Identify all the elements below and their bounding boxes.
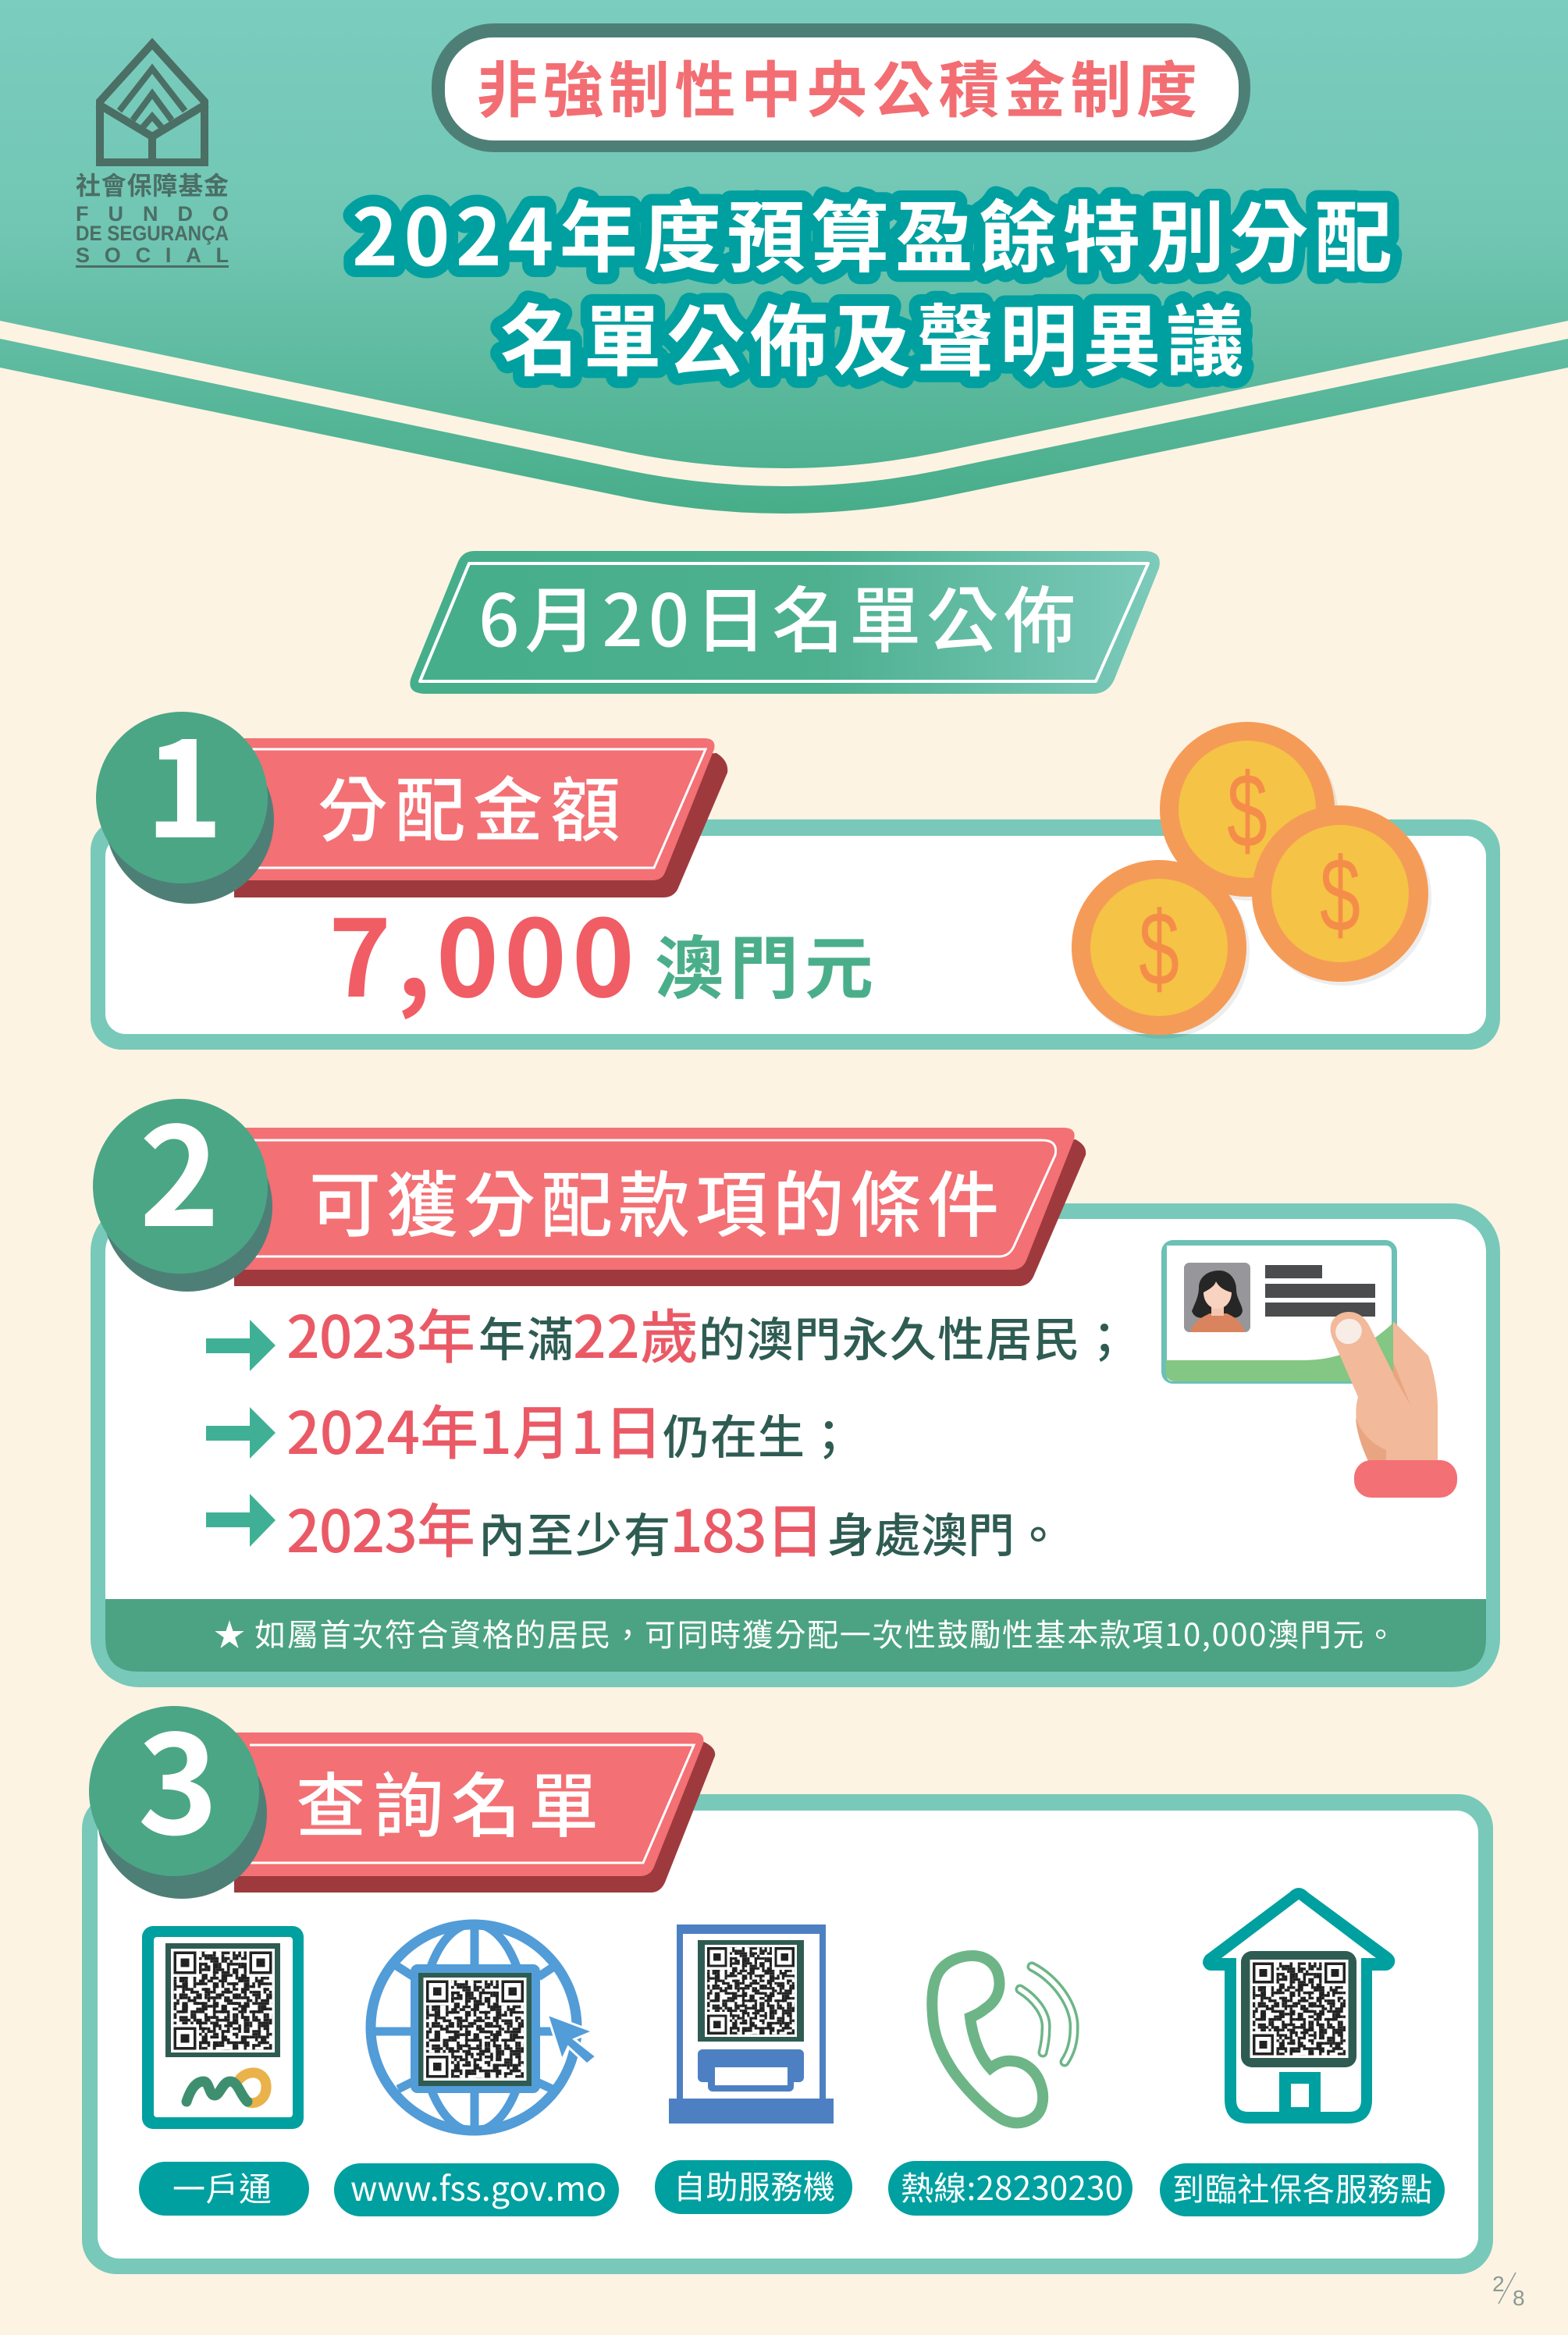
- top pill heading: [432, 23, 1250, 152]
- arrow: [206, 1407, 276, 1459]
- heading 3: 查詢名單: [234, 1733, 715, 1893]
- logo text: [76, 166, 229, 268]
- number badge 3: 3: [137, 1676, 219, 1874]
- label: 自助服務機: 自助服務機: [674, 2161, 835, 2208]
- main title: 名單公佈及聲明異議: [500, 279, 1244, 392]
- logo text: SOCIAL: [76, 243, 229, 267]
- icon: globe website QR: [370, 1924, 596, 2131]
- heading 1: 分配金額: [234, 738, 727, 897]
- icon: self-service kiosk QR: [669, 1925, 834, 2124]
- condition 1: 年滿: [478, 1303, 574, 1370]
- number badge 2: [93, 1068, 272, 1292]
- footer note bar: [105, 1599, 1486, 1672]
- condition 2: [206, 1386, 852, 1471]
- icon: logo house tree: [98, 44, 207, 162]
- coin right: $: [1320, 836, 1360, 954]
- number badge 1: [96, 684, 274, 904]
- main title: 名單公佈及聲明異議: [500, 279, 1244, 392]
- main title: [352, 175, 1392, 392]
- icon: house service point QR: [1203, 1888, 1395, 2124]
- number badge 2: 2: [139, 1068, 220, 1266]
- coin top: [1160, 722, 1338, 901]
- unit: 澳門元: 澳門元: [655, 914, 873, 1013]
- header banner: [0, 0, 1568, 514]
- top pill heading: 非強制性中央公積金制度: [477, 42, 1197, 130]
- icon: mobile app QR: [142, 1926, 304, 2129]
- label: 一戶通: 一戶通: [172, 2163, 272, 2211]
- mo logo: [187, 2073, 266, 2103]
- cursor: [547, 2014, 596, 2064]
- page number: [1492, 2272, 1525, 2310]
- condition 3: 內至少有: [478, 1498, 670, 1566]
- label: 一戶通: [139, 2162, 309, 2216]
- coin top: $: [1227, 752, 1268, 869]
- heading 1: 分配金額: 分配金額: [318, 754, 620, 855]
- panel 1: amount: [91, 819, 1500, 1050]
- condition 2: 2024年1月1日: [286, 1386, 663, 1471]
- icon: ID card in hand: [1161, 1240, 1457, 1498]
- label: 熱線:28230230: 熱線:28230230: [901, 2163, 1123, 2210]
- footer note bar: ★ 如屬首次符合資格的居民，可同時獲分配一次性鼓勵性基本款項10,000澳門元。: [214, 1610, 1396, 1655]
- condition 3: 身處澳門。: [827, 1498, 1061, 1566]
- amount: 7,000: 7,000: [329, 874, 635, 1028]
- main title: 2024年度預算盈餘特別分配: [352, 175, 1392, 288]
- logo text: DE SEGURANÇA: [76, 222, 229, 245]
- photo: [1184, 1263, 1250, 1332]
- heading 2: 可獲分配款項的條件: 可獲分配款項的條件: [309, 1148, 999, 1252]
- icon: coins: [1072, 722, 1431, 1039]
- date badge: 6月20日名單公佈: 6月20日名單公佈: [478, 563, 1076, 667]
- date badge: 6月20日名單公佈: [410, 551, 1160, 694]
- heading 2: 可獲分配款項的條件: [234, 1128, 1086, 1286]
- condition 3: 2023年: [286, 1484, 475, 1569]
- coin left: [1072, 860, 1250, 1039]
- logo: Fundo de Segurança Social: [76, 44, 229, 268]
- page number: 2: [1492, 2272, 1505, 2296]
- condition 1: 22歲: [573, 1290, 699, 1375]
- number badge 3: [89, 1676, 267, 1899]
- icon: telephone hotline: [932, 1956, 1074, 2123]
- arrow: [206, 1494, 276, 1547]
- coin left: $: [1139, 890, 1179, 1008]
- cuff: [1354, 1460, 1457, 1498]
- condition 1: 的澳門永久性居民；: [699, 1303, 1128, 1370]
- page number: 8: [1513, 2286, 1525, 2310]
- condition 3: 183日: [670, 1484, 824, 1569]
- label: www.fss.gov.mo: www.fss.gov.mo: [350, 2163, 606, 2211]
- panel 2: conditions: [91, 1203, 1500, 1687]
- logo text: 社會保障基金: [76, 166, 229, 202]
- panel 3: lookup: [82, 1794, 1493, 2274]
- condition 3: [206, 1484, 1061, 1569]
- main title: 2024年度預算盈餘特別分配: [352, 175, 1392, 288]
- condition 1: 2023年: [286, 1290, 475, 1375]
- number badge 1: 1: [145, 684, 223, 876]
- coin right: [1252, 805, 1431, 986]
- hand: [1331, 1312, 1438, 1461]
- arrow: [206, 1320, 276, 1371]
- logo text: FUNDO: [76, 202, 229, 226]
- heading 3: 查詢名單: 查詢名單: [296, 1750, 599, 1851]
- condition 1: [206, 1290, 1128, 1375]
- label: 到臨社保各服務點: 到臨社保各服務點: [1172, 2163, 1432, 2210]
- condition 2: 仍在生；: [663, 1400, 852, 1468]
- card bars: [1265, 1265, 1375, 1317]
